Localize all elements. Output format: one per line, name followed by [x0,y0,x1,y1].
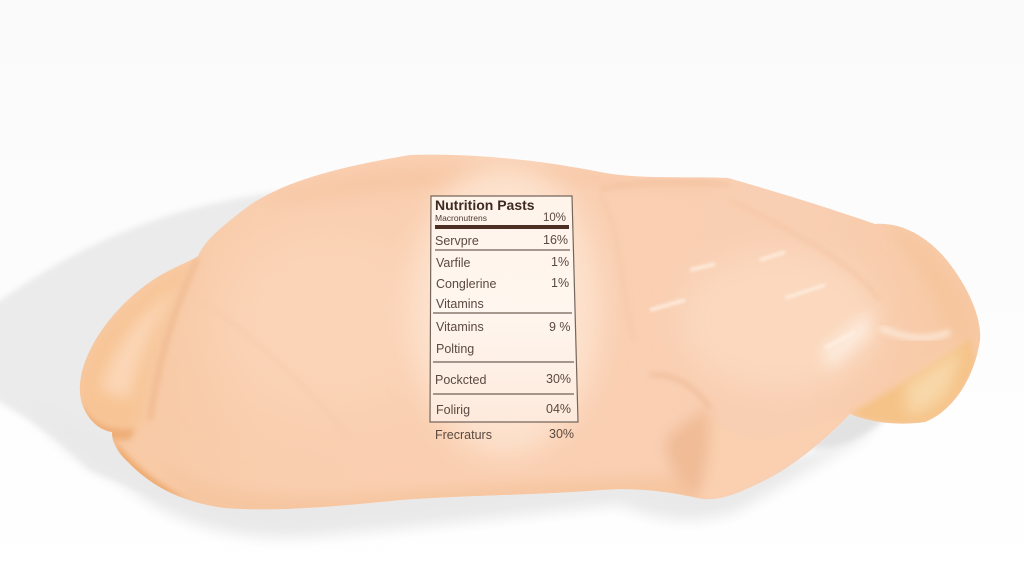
row: servipre [435,233,568,248]
cast shadow [0,192,885,538]
thick divider [435,225,569,229]
label panel [430,196,578,422]
meat shading [80,165,975,525]
row: varfile [436,255,569,270]
row: vitamins two [436,320,571,334]
row: vitamins two: Vitamins [436,320,484,334]
label heading: Nutrition Pasts [435,197,535,213]
row: varfile: 1% [551,255,569,269]
row: folirig [436,402,571,417]
row: servipre: 16% [543,233,568,247]
row: pockcted: 30% [546,372,571,386]
row: frecraturs: Frecraturs [435,428,492,442]
row: vitamins one: Vitamins [436,297,484,311]
row: macronutrients: 10% [543,212,566,224]
row: pockcted: Pockcted [435,373,486,387]
row: frecraturs: 30% [549,427,574,441]
row: vitamins two: 9 % [549,320,571,334]
row: folirig: 04% [546,402,571,416]
row: folirig: Folirig [436,403,470,417]
row: conglerine: 1% [551,276,569,290]
row: conglerine: Conglerine [436,277,497,291]
row: varfile: Varfile [436,256,471,270]
row: pockcted [435,372,571,387]
row: macronutrients: Macronutrens [435,213,487,223]
chicken breast [80,155,980,525]
row: frecraturs [435,427,574,442]
row: servipre: Servpre [435,234,479,248]
row: polting: Polting [436,342,474,356]
row: macronutrients [435,212,566,224]
row: conglerine [436,276,569,291]
nutrition label [430,196,578,442]
